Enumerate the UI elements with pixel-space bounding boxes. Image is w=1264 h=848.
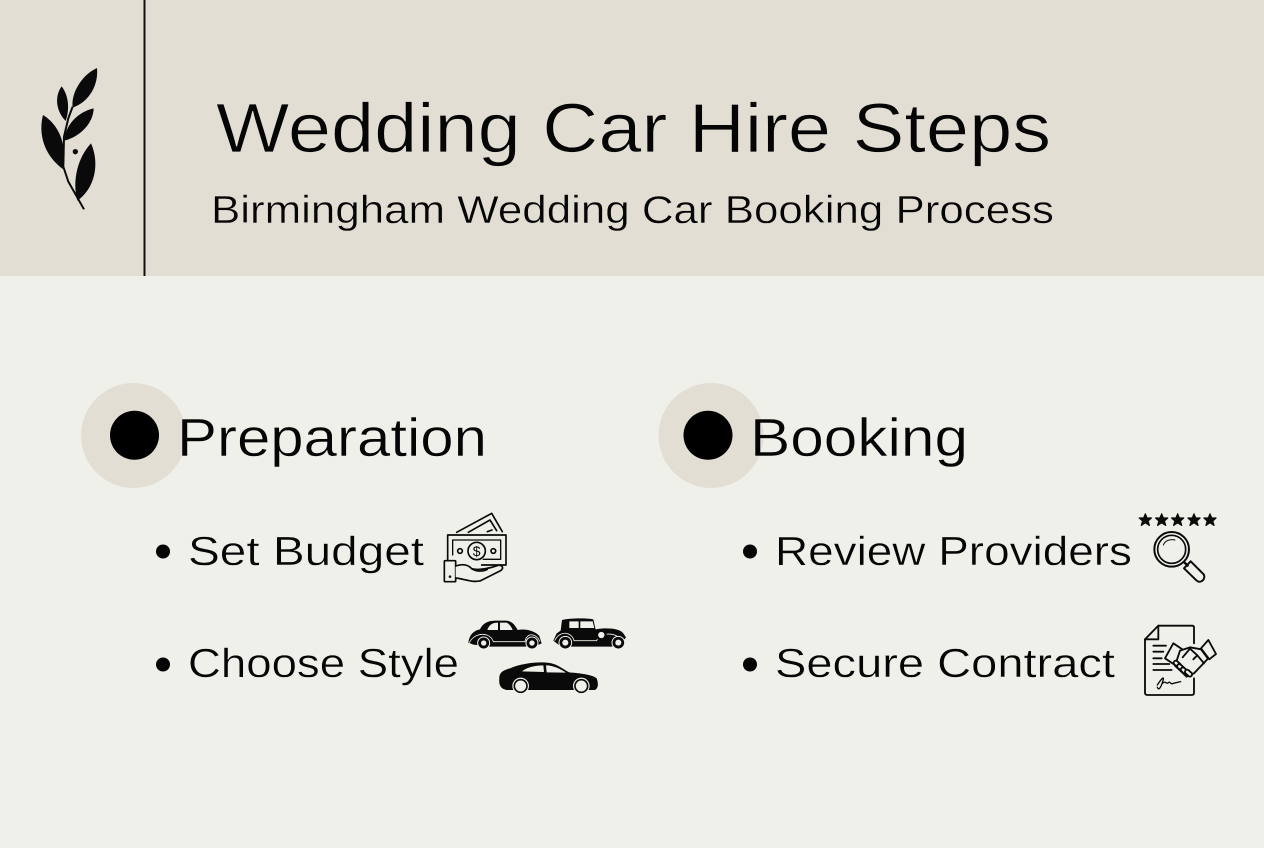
section marker: booking [658, 383, 764, 488]
icon: three cars [468, 618, 626, 694]
contract document [1145, 626, 1194, 695]
step: review providers: Review Providers [775, 528, 1132, 574]
header band [0, 0, 1264, 276]
title: Wedding Car Hire Steps [216, 89, 1051, 167]
icon: five stars and magnifier [1139, 514, 1216, 582]
modern sedan [499, 662, 598, 694]
magnifier [1154, 532, 1204, 582]
heading: preparation: Preparation [177, 408, 487, 468]
vintage car one [468, 621, 542, 649]
icon: contract and handshake [1145, 626, 1216, 695]
icon: money in hand [444, 513, 506, 582]
subtitle: Birmingham Wedding Car Booking Process [211, 189, 1054, 232]
panel: preparation [81, 383, 626, 694]
handshake [1165, 640, 1216, 677]
heading: booking: Booking [750, 408, 968, 468]
step: set budget: Set Budget [188, 528, 424, 574]
icon: olive branch [41, 68, 97, 209]
section marker: preparation [81, 383, 186, 488]
five stars [1139, 514, 1216, 525]
step: secure contract: Secure Contract [775, 640, 1115, 686]
panel: booking [658, 383, 1216, 695]
step: choose style: Choose Style [188, 640, 459, 686]
vintage car two [553, 618, 626, 649]
icon: money in hand: $ [473, 543, 481, 559]
